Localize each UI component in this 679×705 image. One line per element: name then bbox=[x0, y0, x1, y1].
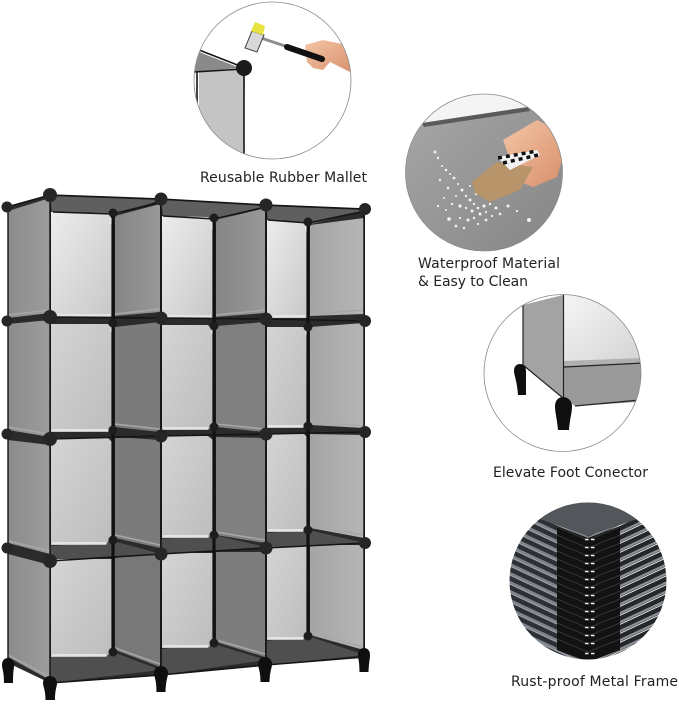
waterproof label: Waterproof Material bbox=[418, 256, 560, 272]
callout: foot connector bbox=[483, 294, 648, 481]
mallet label: Reusable Rubber Mallet bbox=[200, 170, 368, 186]
back panels bbox=[51, 212, 307, 657]
waterproof label: & Easy to Clean bbox=[418, 274, 528, 290]
side panel bevel strips bbox=[8, 309, 364, 677]
cube storage organizer bbox=[2, 188, 371, 700]
frame rails bbox=[7, 195, 365, 683]
cube dark underlay bbox=[8, 195, 365, 683]
frame chevrons bbox=[557, 527, 620, 652]
post highlights bbox=[111, 218, 306, 335]
shelf surfaces bbox=[50, 530, 365, 683]
metal frame photo circle bbox=[509, 502, 667, 662]
water droplets bbox=[434, 150, 531, 229]
callout: metal frame bbox=[509, 502, 678, 690]
foot circle outline bbox=[484, 294, 641, 452]
callout: waterproof material bbox=[405, 93, 563, 290]
waterproof label bbox=[418, 256, 560, 290]
frame highlights bbox=[585, 540, 595, 654]
callout: rubber mallet bbox=[194, 2, 368, 186]
feet bbox=[2, 648, 370, 700]
back panel bottom highlights bbox=[52, 314, 305, 656]
foot photo circle bbox=[514, 295, 641, 430]
waterproof photo circle bbox=[405, 93, 563, 253]
back connectors bbox=[108, 208, 312, 656]
mallet circle outline bbox=[194, 2, 351, 159]
vertical posts bbox=[8, 195, 364, 683]
foot label: Elevate Foot Conector bbox=[493, 465, 648, 481]
mallet photo circle bbox=[194, 22, 350, 154]
metal frame label: Rust-proof Metal Frame bbox=[511, 674, 678, 690]
front connectors bbox=[2, 188, 371, 568]
top shelf surfaces bbox=[50, 196, 365, 224]
side panels bbox=[8, 198, 364, 680]
waterproof circle outline bbox=[406, 94, 562, 251]
foot connectors bbox=[514, 364, 526, 395]
